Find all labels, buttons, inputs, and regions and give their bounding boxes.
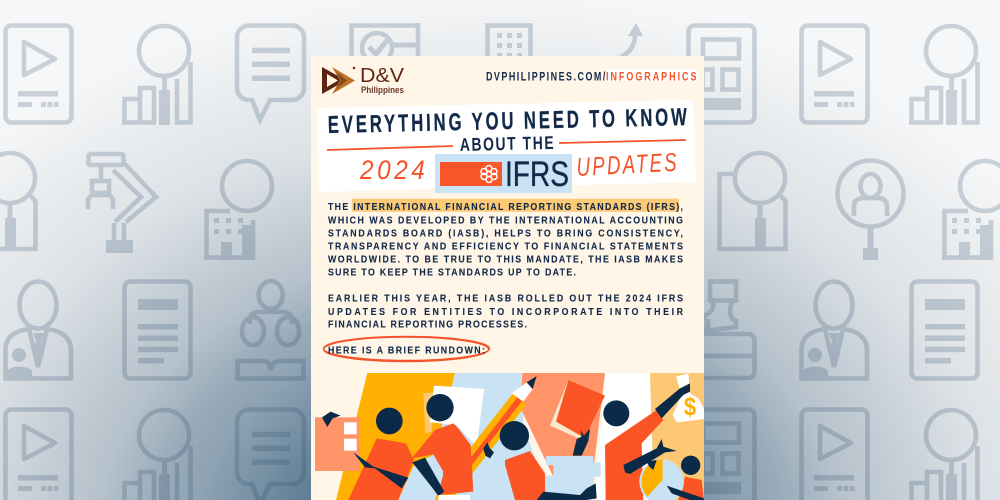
icon: video document xyxy=(6,26,72,122)
website link: DVPHILIPPINES.COM/ xyxy=(486,72,605,84)
person 3 with book and box xyxy=(500,380,605,500)
icon: growth arrow xyxy=(621,23,643,57)
heading: updates: UPDATES xyxy=(576,147,677,182)
logo: D&V Philippines: Philippines xyxy=(361,85,404,95)
paper sheets xyxy=(423,386,484,447)
icon: checklist xyxy=(352,23,418,83)
logo: D&V Philippines xyxy=(322,64,404,95)
IFRS logo: IFRS xyxy=(505,155,569,194)
icon: building magnifier right xyxy=(942,161,1000,260)
salmon panel xyxy=(521,373,605,477)
text block: introduction: THE INTERNATIONAL FINANCIAL REPORTING STANDARDS (IFRS), xyxy=(328,200,683,212)
icon: document magnifier left xyxy=(0,153,36,251)
icon: video document bottom right xyxy=(802,410,868,500)
text block: 2024 updates: FINANCIAL REPORTING PROCESSES. xyxy=(328,318,527,330)
text block: 2024 updates: UPDATES FOR ENTITIES TO INCORPORATE INTO THEIR xyxy=(328,305,683,317)
icon: businessperson xyxy=(6,282,71,379)
blue panel xyxy=(423,373,550,500)
icon: video document bottom xyxy=(6,410,72,500)
website link: INFOGRAPHICS xyxy=(606,72,697,84)
icon: people reading xyxy=(238,281,304,378)
IFRS logo xyxy=(435,154,572,194)
icon: stamp xyxy=(688,282,754,378)
icon: chart magnifier bottom xyxy=(122,410,190,500)
heading: about the: ABOUT THE xyxy=(460,133,554,156)
icon: calculator bottom xyxy=(688,410,754,500)
text block: introduction: TRANSPARENCY AND EFFICIENCY TO FINANCIAL STATEMENTS xyxy=(328,240,683,251)
heading: everything you need to know: EVERYTHING YOU NEED TO KNOW xyxy=(328,104,687,139)
icon: businessperson right xyxy=(802,282,867,379)
icon: office building xyxy=(488,26,530,86)
person 1 xyxy=(348,408,414,500)
illustration: team with documents xyxy=(315,373,704,500)
pencil xyxy=(429,376,537,500)
person 2 xyxy=(353,394,494,500)
panel: infographic poster xyxy=(311,56,704,500)
callout: here is a brief rundown: HERE IS A BRIEF RUNDOWN: xyxy=(328,344,485,355)
icon: video document right xyxy=(802,26,868,122)
icon: robot arm xyxy=(88,154,156,253)
icon: chart magnifier xyxy=(122,26,190,125)
callout: here is a brief rundown xyxy=(324,336,490,362)
icon: chat bubble xyxy=(237,26,304,120)
text block: introduction: SURE TO KEEP THE STANDARDS UP TO DATE. xyxy=(328,266,576,278)
text block: 2024 updates: EARLIER THIS YEAR, THE IASB ROLLED OUT THE 2024 IFRS xyxy=(328,292,683,304)
title banner xyxy=(317,100,696,192)
text block: introduction: WORLDWIDE. TO BE TRUE TO THIS MANDATE, THE IASB MAKES xyxy=(328,253,683,264)
pie chart and person 5 xyxy=(639,456,704,500)
text block: introduction: WHICH WAS DEVELOPED BY THE INTERNATIONAL ACCOUNTING xyxy=(328,214,683,225)
icon: chart magnifier bottom right xyxy=(909,410,978,500)
icon: dollar sign: $ xyxy=(684,393,697,422)
icon: person magnifier xyxy=(838,160,904,260)
person 4 with money bag xyxy=(603,373,704,500)
logo: D&V Philippines: D&V xyxy=(360,64,404,87)
icon: chat bubble bottom xyxy=(237,410,304,500)
icon: building magnifier xyxy=(204,161,272,260)
website link xyxy=(486,69,697,84)
amber panel xyxy=(336,373,455,500)
white panel xyxy=(595,373,654,500)
text block: 2024 updates xyxy=(328,292,683,330)
text block: introduction xyxy=(328,199,683,278)
icon: document magnifier xyxy=(720,153,786,251)
heading: 2024: 2024 xyxy=(359,156,425,185)
text block: introduction: STANDARDS BOARD (IASB), HELPS TO BRING CONSISTENCY, xyxy=(328,227,683,238)
icon: report document right xyxy=(912,282,978,378)
icon: calculator xyxy=(688,26,754,122)
checklist card xyxy=(315,412,359,471)
icon: IFRS flower xyxy=(481,166,497,182)
icon: report document xyxy=(124,282,190,378)
icon: chart magnifier right xyxy=(909,26,978,125)
light amber panel xyxy=(650,373,704,500)
